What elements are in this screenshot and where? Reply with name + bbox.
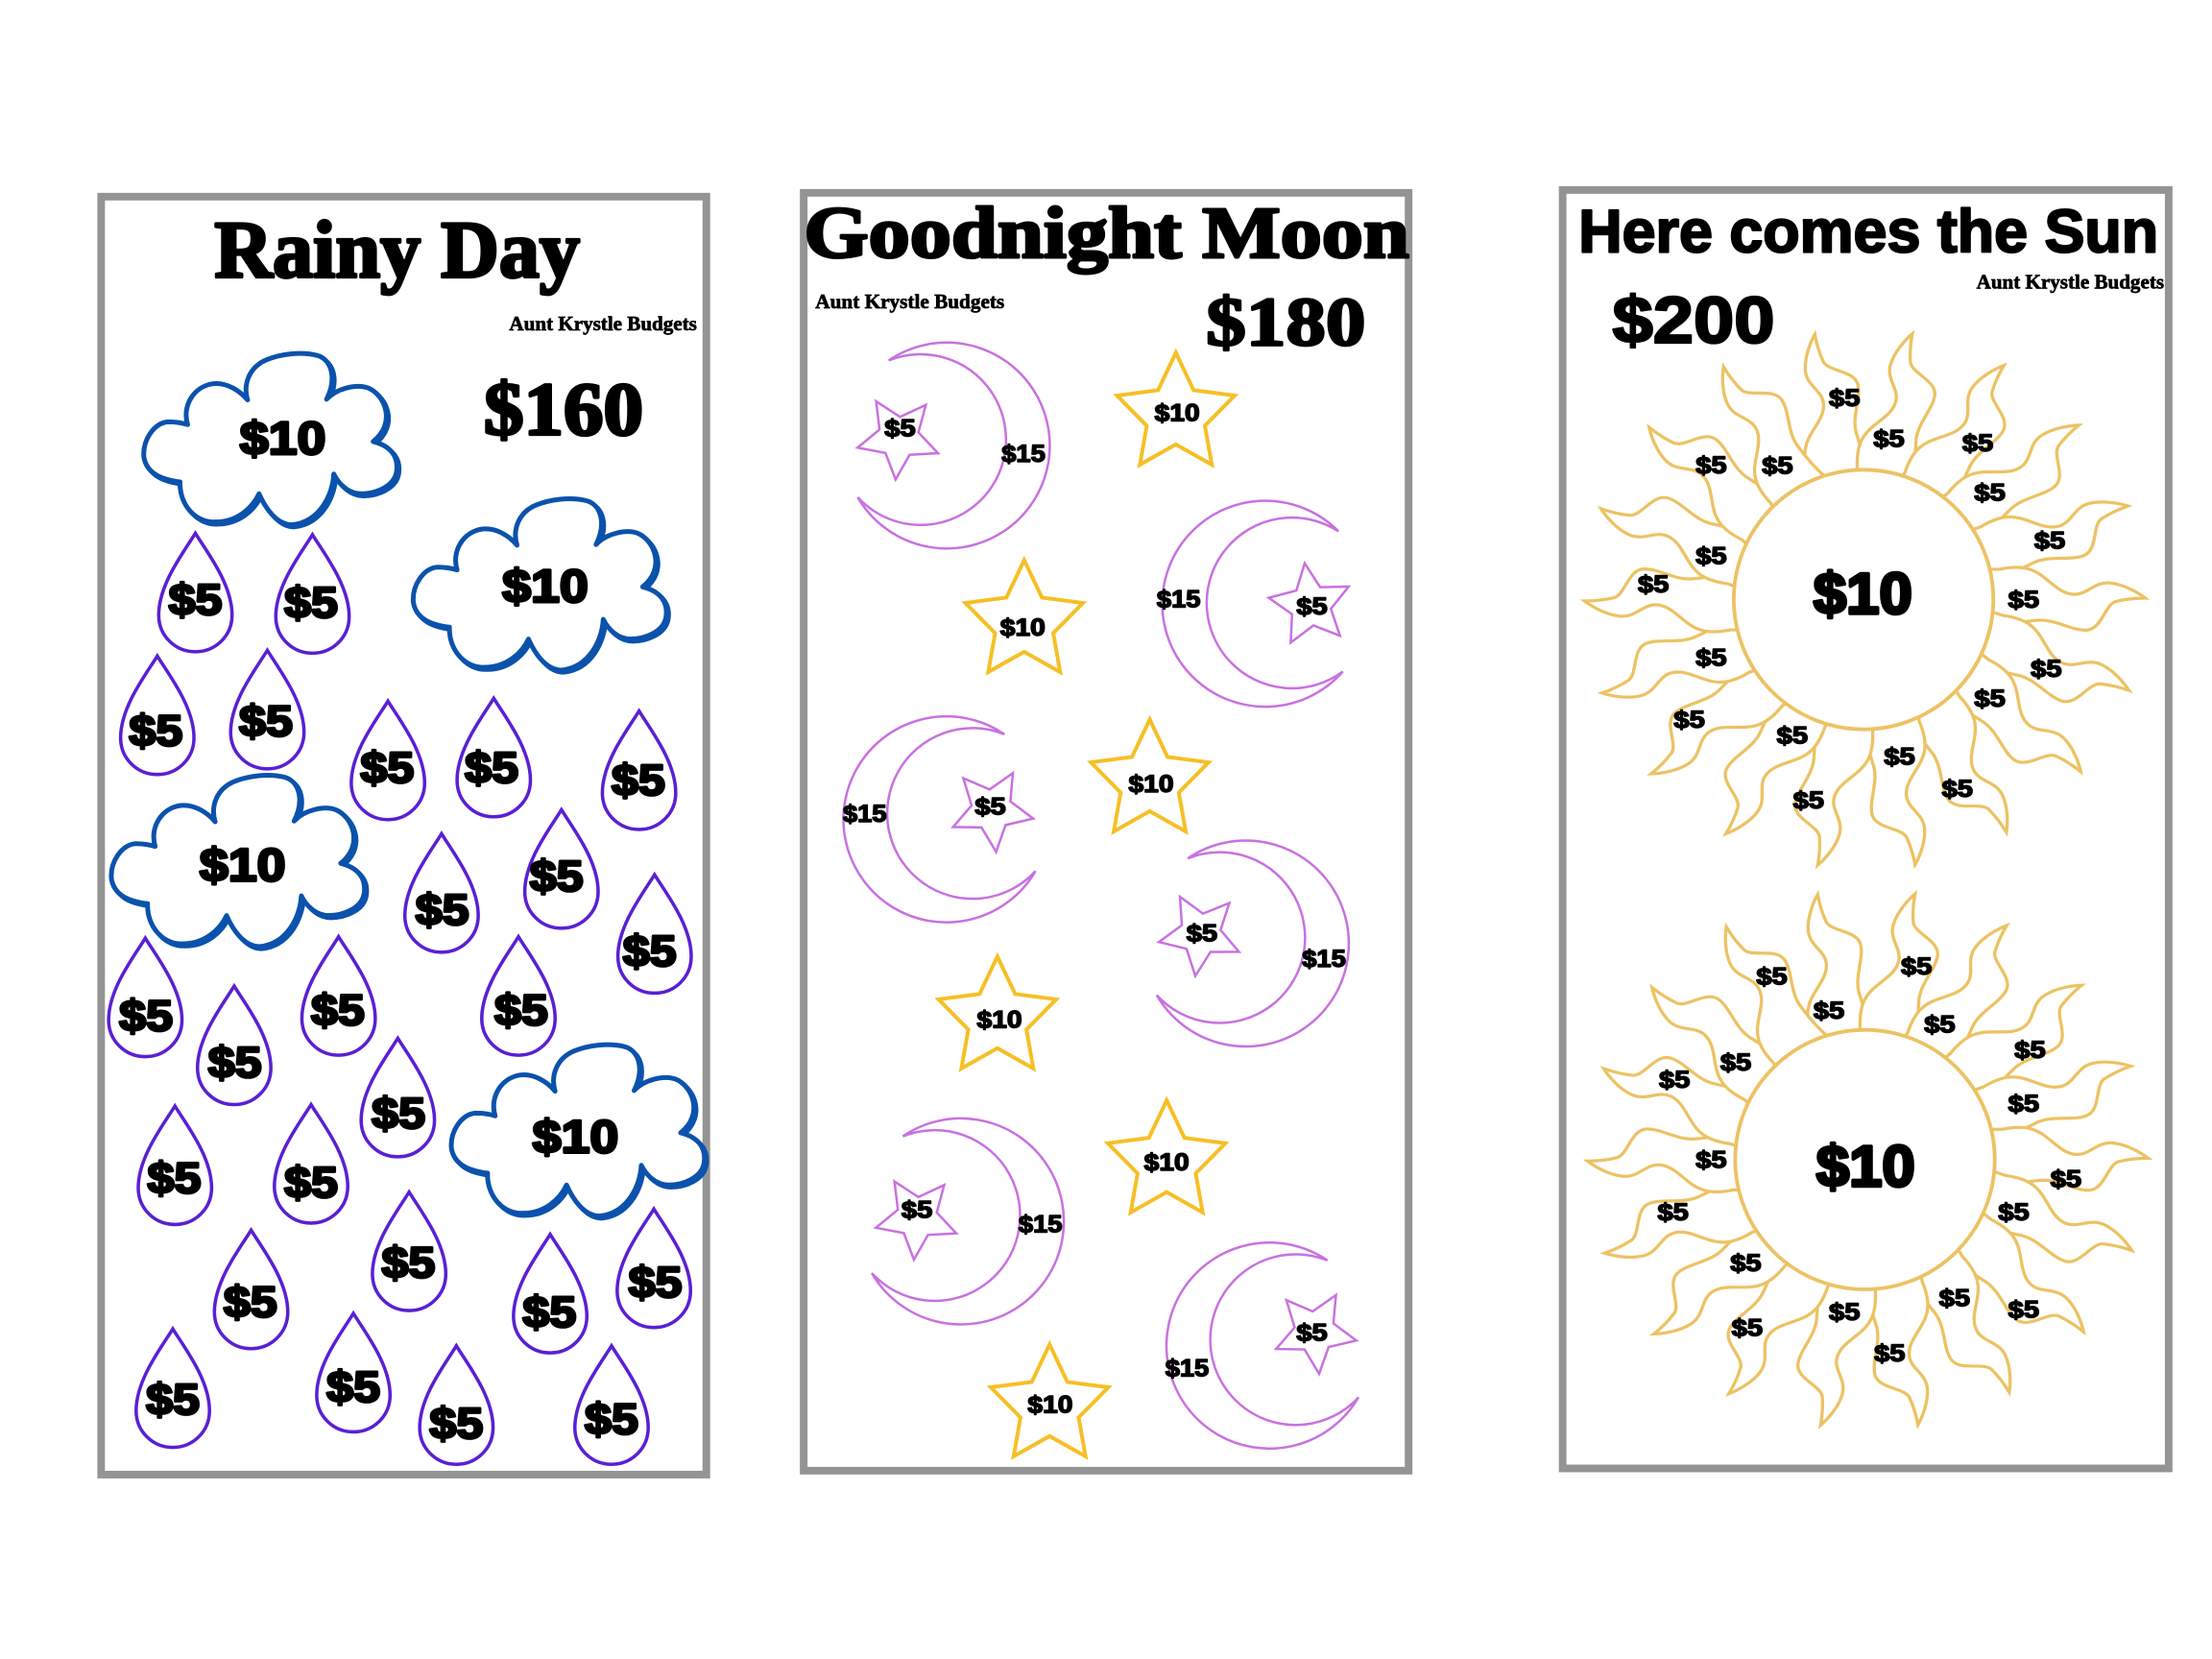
icon: cloud $10 [111, 776, 367, 949]
total: $160: $160 [484, 369, 643, 451]
icon: crescent moon $15 with star $5 [846, 343, 1049, 548]
icon: raindrop $5 [108, 938, 182, 1057]
icon: sun 1: $5 [1829, 385, 1861, 412]
icon: sun 1: $5 [2034, 528, 2065, 555]
icon: raindrop $5: $5 [416, 885, 469, 934]
icon: raindrop $5: $5 [311, 986, 365, 1035]
icon: star $10 [1108, 1100, 1225, 1213]
icon: raindrop $5 [275, 1105, 348, 1223]
icon: raindrop $5 [373, 1192, 445, 1310]
icon: raindrop $5 [617, 1209, 690, 1328]
icon: sun 2: $5 [1939, 1286, 1970, 1312]
total: $200: $200 [1613, 282, 1774, 357]
icon: raindrop $5: $5 [146, 1375, 200, 1424]
icon: raindrop $5 [457, 698, 530, 817]
icon: sun 2: $5 [1695, 1147, 1727, 1174]
icon: sun 2: $5 [2051, 1166, 2081, 1192]
icon: raindrop $5 [317, 1313, 390, 1431]
icon: raindrop $5 [361, 1038, 435, 1157]
icon: cloud $10 [451, 1045, 707, 1218]
icon: raindrop $5 [351, 701, 424, 820]
icon: crescent moon $15 with star $5 [1147, 840, 1349, 1046]
icon: raindrop $5 [158, 533, 232, 652]
icon: sun 1: $5 [1777, 722, 1808, 749]
icon: crescent moon $15 with star $5: $5 [974, 793, 1006, 820]
icon: raindrop $5: $5 [224, 1278, 277, 1327]
icon: sun 2: $5 [1901, 953, 1932, 980]
brand: Aunt Krystle Budgets: Aunt Krystle Budgets [509, 314, 697, 335]
icon: raindrop $5 [482, 937, 555, 1055]
icon: raindrop $5 [136, 1329, 209, 1448]
icon: raindrop $5: $5 [494, 986, 548, 1035]
icon: star $10: $10 [1144, 1149, 1190, 1176]
icon: raindrop $5: $5 [381, 1238, 435, 1287]
icon: sun 1: $5 [1673, 707, 1705, 733]
icon: sun 2: $5 [2008, 1296, 2039, 1323]
icon: crescent moon $15 with star $5: $5 [884, 416, 916, 443]
icon: sun 1: $5 [1884, 743, 1915, 770]
icon: raindrop $5: $5 [169, 575, 222, 624]
icon: cloud $10 [144, 353, 399, 527]
title: Rainy Day: Rainy Day [214, 205, 580, 296]
icon: raindrop $5 [138, 1106, 211, 1224]
icon: raindrop $5: $5 [208, 1038, 262, 1087]
panel: Rainy Day [101, 197, 707, 1475]
icon: crescent moon $15 with star $5 [1166, 1242, 1371, 1449]
icon: raindrop $5: $5 [326, 1362, 380, 1411]
icon: raindrop $5 [575, 1346, 648, 1464]
icon: raindrop $5: $5 [239, 696, 293, 745]
icon: crescent moon $15 with star $5 [1144, 483, 1372, 722]
icon: raindrop $5: $5 [612, 756, 665, 805]
icon: crescent moon $15 with star $5: $15 [1302, 946, 1346, 973]
icon: raindrop $5: $5 [284, 578, 338, 627]
icon: raindrop $5: $5 [623, 926, 677, 975]
icon: raindrop $5 [301, 937, 375, 1055]
icon: sun 2: $5 [1924, 1012, 1956, 1039]
icon: raindrop $5: $5 [522, 1287, 576, 1336]
icon: raindrop $5 [525, 809, 598, 928]
icon: raindrop $5: $5 [585, 1395, 638, 1444]
icon: raindrop $5 [198, 986, 271, 1105]
icon: sun 1: $5 [1762, 453, 1793, 480]
icon: star $10: $10 [1000, 614, 1046, 641]
icon: sun 2: $5 [1874, 1340, 1906, 1367]
icon: crescent moon $15 with star $5: $15 [1019, 1211, 1063, 1238]
brand: Aunt Krystle Budgets: Aunt Krystle Budgets [1977, 272, 2164, 293]
icon: crescent moon $15 with star $5 [843, 716, 1047, 923]
icon: crescent moon $15 with star $5: $5 [1187, 921, 1217, 948]
icon: star $10: $10 [1027, 1392, 1072, 1419]
icon: sun 2: $5 [1756, 964, 1788, 991]
brand: Aunt Krystle Budgets: Aunt Krystle Budgets [815, 292, 1004, 313]
icon: raindrop $5: $5 [372, 1089, 425, 1138]
icon: sun 1: $5 [1695, 543, 1727, 570]
icon: sun 2: $5 [1732, 1314, 1763, 1341]
icon: raindrop $5: $5 [129, 707, 182, 756]
icon: raindrop $5 [618, 875, 691, 993]
icon: sun 2: $5 [1658, 1199, 1689, 1226]
icon: raindrop $5: $5 [530, 852, 584, 901]
icon: sun 2: $5 [1730, 1250, 1762, 1277]
icon: cloud $10: $10 [502, 561, 589, 613]
title: Goodnight Moon: Goodnight Moon [805, 192, 1409, 274]
total: $180: $180 [1206, 284, 1365, 361]
icon: sun 1: $5 [1974, 685, 2006, 712]
icon: raindrop $5: $5 [629, 1258, 682, 1307]
icon: sun 1: $5 [1962, 430, 1993, 457]
panel: Goodnight Moon [804, 192, 1409, 1471]
icon: sun 1: $5 [2031, 656, 2062, 683]
icon: raindrop $5 [514, 1235, 587, 1353]
icon: star $10: $10 [1155, 400, 1200, 427]
icon: sun 2: $5 [1998, 1199, 2030, 1226]
icon: raindrop $5 [602, 711, 676, 830]
icon: sun 1: $5 [1638, 571, 1669, 598]
icon: star $10 [1091, 719, 1209, 831]
title: Here comes the Sun: Here comes the Sun [1578, 198, 2158, 265]
icon: sun 1: $5 [2008, 587, 2039, 613]
icon: sun 2: $10 [1816, 1133, 1915, 1198]
icon: raindrop $5 [405, 833, 478, 952]
icon: crescent moon $15 with star $5: $15 [843, 801, 887, 828]
icon: crescent moon $15 with star $5: $5 [1296, 1320, 1328, 1347]
icon: crescent moon $15 with star $5: $5 [902, 1197, 932, 1224]
icon: crescent moon $15 with star $5: $15 [1001, 441, 1046, 468]
icon: sun 1: $5 [1695, 644, 1727, 671]
icon: raindrop $5: $5 [119, 991, 173, 1040]
icon: sun 1: $5 [1793, 787, 1824, 814]
icon: crescent moon $15 with star $5 [864, 1118, 1064, 1324]
icon: star $10 [1117, 352, 1235, 465]
icon: sun 1: $5 [1695, 452, 1727, 479]
icon: star $10 [966, 560, 1083, 672]
icon: star $10: $10 [977, 1006, 1022, 1033]
icon: raindrop $5: $5 [360, 743, 414, 792]
icon: raindrop $5 [420, 1346, 493, 1464]
icon: sun 2 [1587, 889, 2149, 1431]
icon: sun 1: $5 [1873, 426, 1905, 453]
icon: raindrop $5 [230, 650, 304, 769]
icon: sun 1: $5 [1942, 776, 1973, 803]
icon: sun 1: $10 [1814, 561, 1912, 626]
icon: sun 1: $5 [1974, 480, 2006, 507]
icon: cloud $10: $10 [533, 1111, 618, 1163]
icon: sun 2: $5 [2008, 1091, 2039, 1118]
icon: star $10 [991, 1344, 1108, 1456]
icon: cloud $10 [413, 499, 668, 672]
icon: sun 1 [1584, 328, 2146, 871]
icon: star $10 [939, 956, 1056, 1069]
icon: raindrop $5: $5 [429, 1399, 483, 1448]
icon: raindrop $5: $5 [148, 1153, 201, 1202]
icon: crescent moon $15 with star $5: $5 [1296, 593, 1328, 620]
icon: raindrop $5: $5 [465, 743, 518, 792]
icon: sun 2: $5 [1829, 1299, 1861, 1326]
icon: raindrop $5 [276, 535, 349, 653]
icon: cloud $10: $10 [240, 413, 325, 465]
icon: raindrop $5 [121, 656, 194, 775]
icon: crescent moon $15 with star $5: $15 [1157, 586, 1201, 613]
icon: sun 2: $5 [2014, 1037, 2046, 1064]
icon: raindrop $5 [214, 1230, 288, 1349]
icon: raindrop $5: $5 [284, 1158, 338, 1207]
icon: crescent moon $15 with star $5: $15 [1166, 1355, 1209, 1382]
icon: sun 2: $5 [1814, 998, 1844, 1024]
icon: sun 2: $5 [1720, 1049, 1751, 1076]
icon: sun 2: $5 [1659, 1067, 1690, 1094]
icon: star $10: $10 [1129, 771, 1174, 798]
icon: cloud $10: $10 [200, 839, 286, 891]
panel: Here comes the Sun [1563, 190, 2169, 1468]
